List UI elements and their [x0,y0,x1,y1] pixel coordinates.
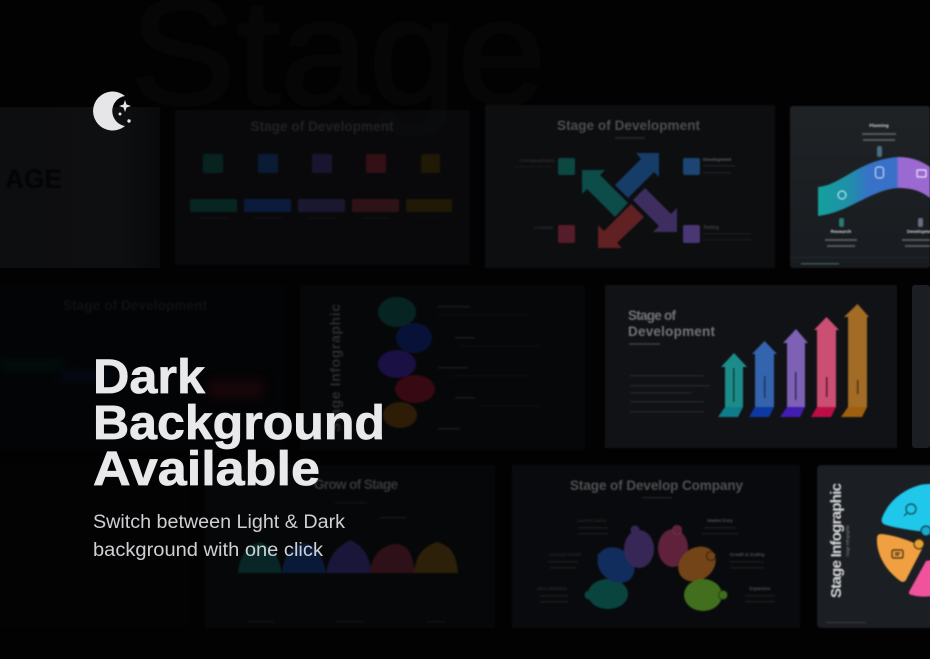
panel: stage infographic pie slide [817,465,930,628]
arrow: teal [582,170,628,217]
petal nodes [584,590,594,600]
panel: faint bottom-left slide [0,465,190,628]
panel: crossing arrows slide [485,105,775,268]
panel: stage of develop company slide: Expansion [749,586,771,591]
panel: right edge slide [912,285,930,448]
panel: stage of develop company slide: Idea Validation [537,586,567,591]
wedge: cyan [882,484,930,536]
panel: crossing arrows slide: Complete [534,225,553,230]
panel: stage of develop company slide: Growth & Scaling [730,552,765,557]
title: Development [628,324,716,339]
panel: vertical stage infographic slide: Stage Infographic [327,304,343,432]
panel: faint stage of development slide: Stage of Development [63,298,208,313]
arrow: purple [633,188,677,232]
panel: grow of stage slide [205,465,495,628]
arrow 4 pink [811,317,839,417]
vertical title: Stage Infographic [828,483,845,598]
title: Stage of Develop Company [570,478,743,493]
subheading [93,512,346,561]
title: Stage of [628,308,676,323]
icon: chart [904,504,916,516]
subtitle: Stage Infographic [845,524,850,557]
nodes [921,526,930,536]
panel: cover slide AGE: AGE [5,164,62,194]
panel: faint stage of development slide [0,285,285,450]
subheading: Switch between Light & Dark [93,512,346,533]
petals [588,579,628,609]
panel: rising arrows slide [605,285,897,448]
icon tiles [558,158,575,175]
footer [801,263,839,264]
label: Research: Research [831,229,852,234]
wedge: orange [877,534,922,582]
arrow 3 purple [780,329,808,417]
panel: stage of develop company slide [512,465,800,628]
panel: five steps slide [175,110,470,265]
ribbon [818,157,930,216]
panel: stage of develop company slide: Concept Growth [549,552,582,557]
subheading: background with one click [93,540,324,561]
heading [93,351,385,496]
arrow: blue [615,153,659,198]
panel: stage of develop company slide: Market Entry [707,518,733,523]
arrow 5 orange [841,304,869,417]
arrow: red [598,204,644,248]
panel: crossing arrows slide: Testing [703,225,719,231]
icon: moon and stars [93,92,131,130]
labels: Conceptualization [519,158,555,163]
body text [630,375,710,412]
panel: five steps slide: Stage of Development [250,119,394,134]
arrow 2 blue [749,341,777,417]
heading: Dark [93,351,205,404]
heading: Available [93,443,320,496]
label: Planning: Planning [869,123,889,128]
ribbon icons [838,191,846,199]
panel: crossing arrows slide: Development [703,157,732,162]
panel: wave ribbon slide [790,106,930,268]
icon: chat [892,550,903,558]
panel: cover slide AGE [0,107,160,268]
panel: grow of stage slide: Grow of Stage [314,477,398,492]
arrow 1 teal [718,353,747,417]
heading: Background [93,397,385,450]
labels: Launch Status [578,518,607,523]
panel: vertical stage infographic slide [300,285,585,450]
title: Stage of Development [557,118,700,133]
wedge: pink [909,560,930,597]
